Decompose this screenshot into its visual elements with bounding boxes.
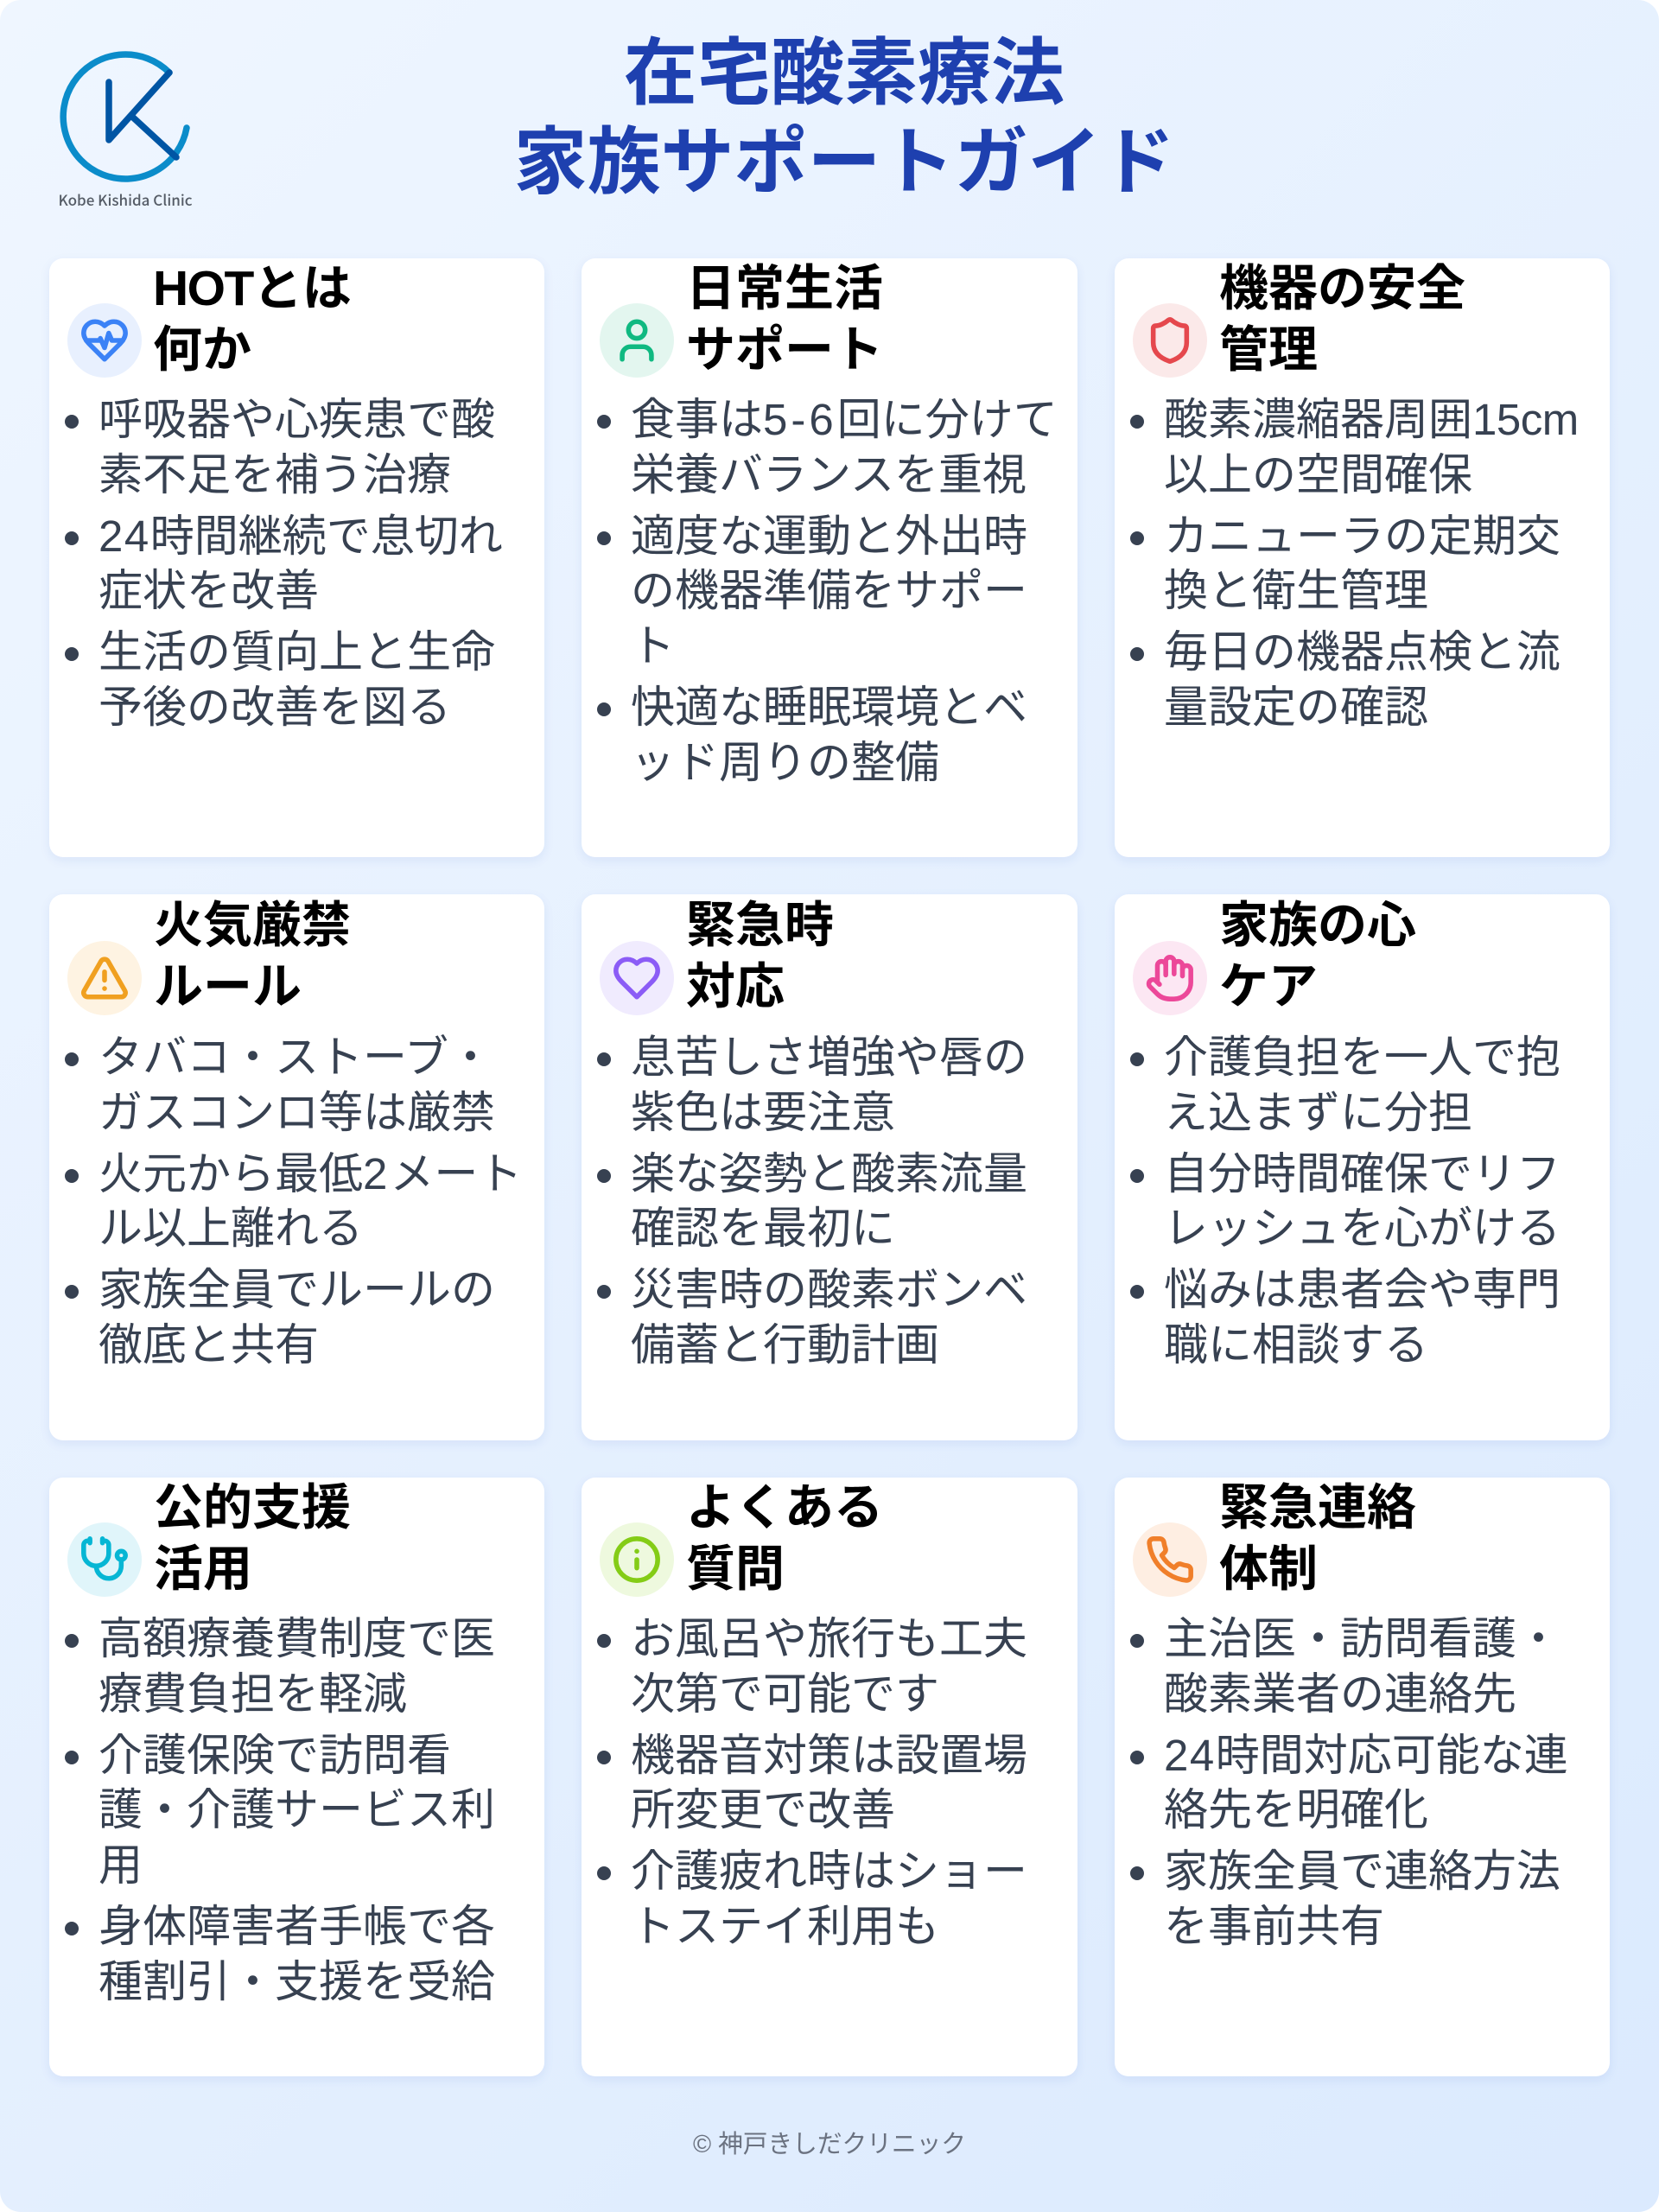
bullet list (1130, 1614, 1568, 1951)
bullet list: 介護負担を一人で抱 (1164, 1033, 1560, 1082)
bullet list: 徹底と共有 (99, 1320, 319, 1370)
icon: phone (1133, 1522, 1207, 1597)
heading (686, 261, 883, 378)
icon: info (600, 1522, 674, 1597)
icon: hand (1133, 941, 1207, 1015)
bullet list: ト (631, 621, 675, 671)
bullet list: 次第で可能です (631, 1669, 939, 1719)
bullet list: 用 (99, 1840, 143, 1890)
bullet list: の機器準備をサポー (631, 566, 1027, 615)
logo: Kobe Kishida Clinic (58, 51, 193, 210)
bullet list: 災害時の酸素ボンベ (631, 1265, 1027, 1314)
panel: 火気厳禁ルール (49, 894, 544, 1440)
bullet list: お風呂や旅行も工夫 (631, 1614, 1027, 1663)
bullet list: 身体障害者手帳で各 (99, 1902, 495, 1951)
heading: 緊急連絡 (1219, 1480, 1416, 1535)
heading: 家族の心 (1219, 898, 1416, 953)
bullet list: 備蓄と行動計画 (631, 1320, 939, 1370)
bullet list: 予後の改善を図る (99, 683, 451, 732)
bullet list: 呼吸器や心疾患で酸 (99, 395, 495, 444)
heading: 活用 (154, 1541, 252, 1597)
bullet list: タバコ・ストーブ・ (99, 1033, 493, 1082)
bullet list: ガスコンロ等は厳禁 (99, 1088, 495, 1137)
heading: HOTとは (153, 261, 352, 316)
bullet list: 機器音対策は設置場 (631, 1730, 1027, 1780)
bullet list: 療費負担を軽減 (99, 1669, 407, 1719)
heading (154, 1480, 351, 1597)
bullet list: 家族全員で連絡方法 (1164, 1847, 1560, 1896)
bullet list: 介護保険で訪問看 (99, 1730, 451, 1780)
title: 在宅酸素療法 (624, 33, 1065, 115)
heading (686, 898, 834, 1014)
heading (153, 261, 352, 378)
bullet list: 火元から最低2メート (99, 1149, 522, 1198)
panel: 日常生活サポート (582, 258, 1077, 857)
panel: 家族の心ケア (1115, 894, 1610, 1440)
bullet list (1130, 395, 1579, 732)
panel: 緊急連絡体制 (1115, 1478, 1610, 2076)
title (513, 33, 1175, 204)
panel: よくある質問 (582, 1478, 1077, 2076)
bullet list: 介護疲れ時はショー (631, 1847, 1027, 1896)
bullet list: 症状を改善 (99, 566, 319, 615)
heading (154, 898, 351, 1014)
bullet list: 以上の空間確保 (1164, 450, 1472, 499)
icon: heart pulse (67, 303, 142, 378)
bullet list (1130, 1033, 1560, 1370)
bullet list: 高額療養費制度で医 (99, 1614, 495, 1663)
heading (1219, 898, 1416, 1014)
icon: shield (1133, 303, 1207, 378)
bullet list: 護・介護サービス利 (99, 1785, 495, 1834)
title: 家族サポートガイド (513, 122, 1175, 204)
heading: 緊急時 (686, 898, 834, 953)
footer: © 神戸きしだクリニック (693, 2131, 966, 2158)
bullet list: 生活の質向上と生命 (99, 627, 495, 677)
heading: 公的支援 (154, 1480, 351, 1535)
icon: stethoscope (67, 1522, 142, 1597)
panel: 緊急時対応 (582, 894, 1077, 1440)
heading: 火気厳禁 (154, 898, 351, 953)
heading: 日常生活 (686, 261, 883, 316)
heading (686, 1480, 883, 1597)
bullet list: 酸素濃縮器周囲15cm (1164, 395, 1579, 444)
panel: 機器の安全管理 (1115, 258, 1610, 857)
bullet list: 量設定の確認 (1164, 683, 1428, 732)
bullet list: 素不足を補う治療 (99, 450, 451, 499)
bullet list: 所変更で改善 (631, 1785, 895, 1834)
bullet list: 自分時間確保でリフ (1164, 1149, 1560, 1198)
bullet list: 紫色は要注意 (631, 1088, 895, 1137)
bullet list: 職に相談する (1164, 1320, 1428, 1370)
heading: 管理 (1219, 322, 1318, 378)
bullet list: 酸素業者の連絡先 (1164, 1669, 1516, 1719)
bullet list: カニューラの定期交 (1164, 512, 1560, 560)
bullet list: トステイ利用も (631, 1902, 939, 1951)
bullet list: 息苦しさ増強や唇の (631, 1033, 1027, 1082)
panel: 公的支援活用 (49, 1478, 544, 2076)
bullet list: え込まずに分担 (1164, 1088, 1472, 1137)
icon: warning triangle (67, 941, 142, 1015)
bullet list: 適度な運動と外出時 (631, 512, 1027, 560)
bullet list: ッド周りの整備 (631, 738, 939, 786)
bullet list: 楽な姿勢と酸素流量 (631, 1149, 1027, 1198)
bullet list: ル以上離れる (99, 1204, 363, 1253)
bullet list: 確認を最初に (631, 1204, 895, 1253)
bullet list (597, 1614, 1027, 1951)
bullet list: 24時間対応可能な連 (1164, 1730, 1568, 1780)
heading: 質問 (686, 1541, 785, 1597)
bullet list: 毎日の機器点検と流 (1164, 627, 1560, 677)
bullet list (597, 395, 1058, 786)
bullet list: 快適な睡眠環境とベ (631, 683, 1027, 732)
bullet list: を事前共有 (1164, 1902, 1384, 1951)
bullet list: レッシュを心がける (1164, 1204, 1560, 1253)
icon: user (600, 303, 674, 378)
icon: heart (600, 941, 674, 1015)
bullet list (597, 1033, 1027, 1370)
heading: ケア (1219, 959, 1318, 1014)
heading (1219, 261, 1465, 378)
bullet list (65, 395, 503, 732)
heading: よくある (686, 1480, 883, 1535)
heading: ルール (154, 959, 302, 1014)
logo: Kobe Kishida Clinic: Kobe Kishida Clinic (58, 188, 193, 210)
bullet list: 絡先を明確化 (1164, 1785, 1428, 1834)
heading: 機器の安全 (1219, 261, 1465, 316)
bullet list: 種割引・支援を受給 (99, 1956, 495, 2006)
bullet list: 家族全員でルールの (99, 1265, 495, 1314)
heading: 体制 (1219, 1541, 1318, 1597)
bullet list: 24時間継続で息切れ (99, 512, 503, 560)
bullet list: 栄養バランスを重視 (631, 450, 1027, 499)
heading (1219, 1480, 1416, 1597)
panel: HOTとは何か (49, 258, 544, 857)
bullet list: 主治医・訪問看護・ (1164, 1614, 1560, 1663)
bullet list (65, 1614, 495, 2006)
heading: 何か (153, 322, 251, 378)
bullet list (65, 1033, 522, 1370)
bullet list: 換と衛生管理 (1164, 566, 1428, 615)
heading: 対応 (686, 959, 785, 1014)
heading: サポート (686, 322, 883, 378)
bullet list: 食事は5-6回に分けて (631, 395, 1058, 444)
bullet list: 悩みは患者会や専門 (1164, 1265, 1560, 1314)
